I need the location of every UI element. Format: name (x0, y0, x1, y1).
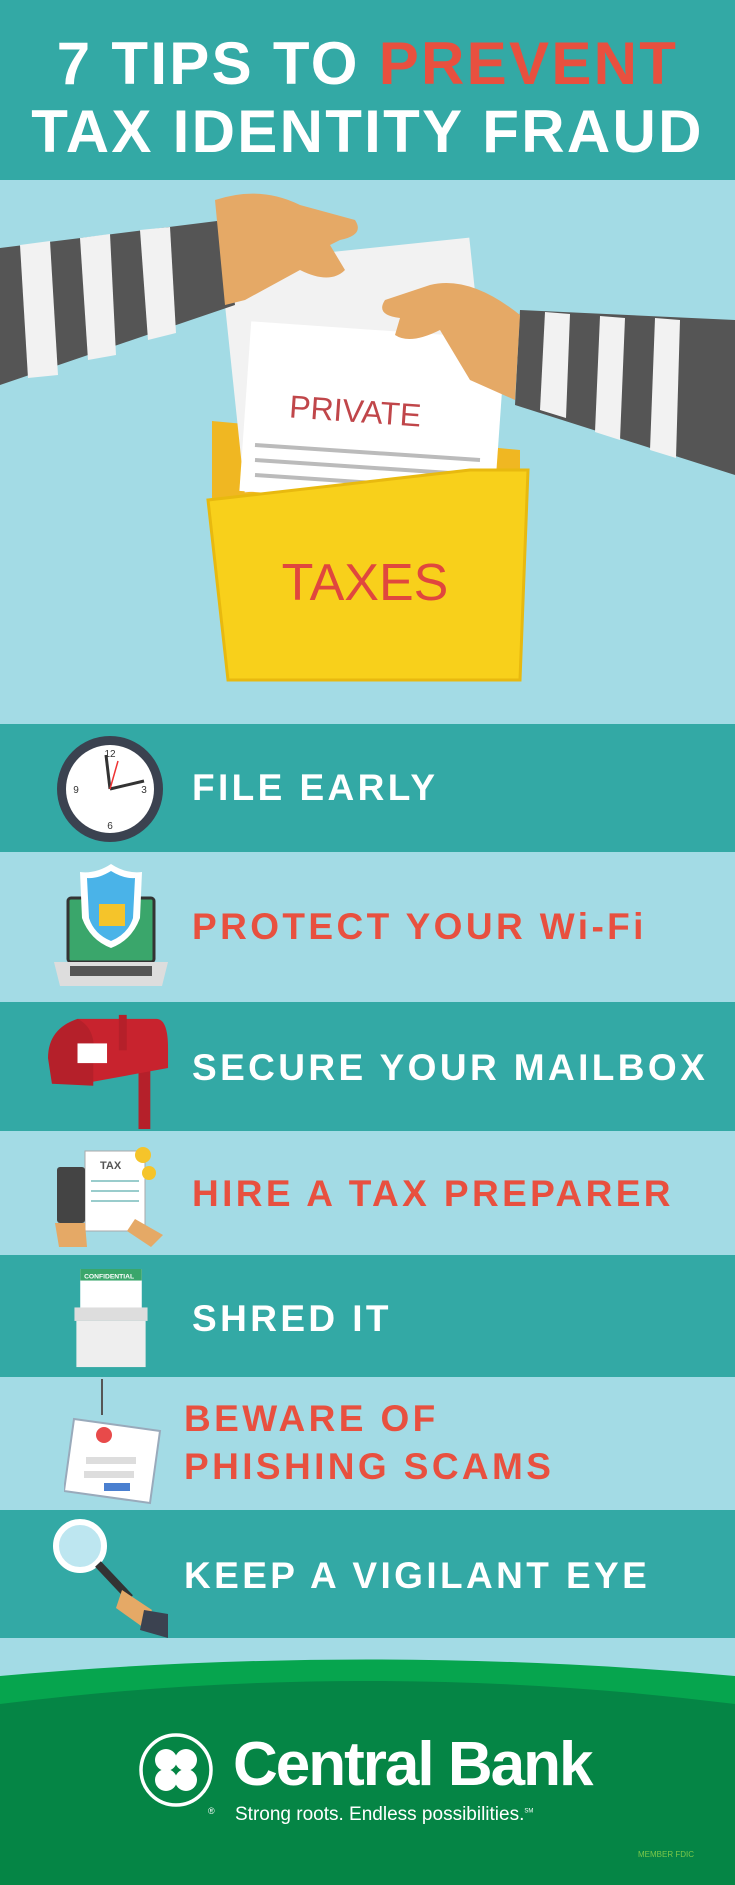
icon: clock: 3 (141, 785, 147, 796)
text: vigilant: KEEP A VIGILANT EYE (184, 1555, 650, 1596)
icon: laptop shield (54, 864, 168, 986)
tip 4: tax preparer (0, 1131, 735, 1255)
papers: PRIVATE (288, 388, 422, 434)
left arm (0, 194, 358, 385)
icon: magnifier (53, 1519, 168, 1638)
hero illustration (0, 194, 735, 682)
text: member fdic: MEMBER FDIC (638, 1850, 694, 1859)
title (31, 30, 704, 165)
logo: central bank (139, 1730, 594, 1825)
text: tax preparer: HIRE A TAX PREPARER (192, 1173, 674, 1214)
icon: flower emblem (139, 1733, 215, 1816)
text: bank name: Central Bank (233, 1730, 591, 1799)
title: 7 TIPS TO PREVENT (57, 30, 678, 97)
tip 1: file early (0, 724, 735, 852)
text: phishing (184, 1398, 554, 1487)
icon: clock: 6 (107, 821, 113, 832)
header band (0, 0, 735, 180)
tip 3: mailbox (0, 1002, 735, 1131)
icon: tax form (55, 1147, 163, 1247)
text: file early: FILE EARLY (192, 767, 438, 808)
hero illustration: TAXES (282, 554, 448, 612)
title: TAX IDENTITY FRAUD (31, 98, 704, 165)
text: phishing: PHISHING SCAMS (184, 1446, 554, 1487)
icon: clock (57, 736, 163, 842)
footer (0, 1638, 735, 1885)
icon: clock: 12 (104, 749, 116, 760)
icon: shredder: CONFIDENTIAL (84, 1274, 134, 1281)
folder back (212, 421, 520, 520)
icon: shredder (74, 1269, 148, 1368)
tip 7: vigilant eye (0, 1510, 735, 1638)
text: shred it: SHRED IT (192, 1298, 392, 1339)
icon: phishing hook (64, 1379, 161, 1504)
papers (221, 238, 506, 509)
text: phishing: BEWARE OF (184, 1398, 439, 1439)
icon: clock: 9 (73, 785, 79, 796)
icon: tax form: TAX (100, 1160, 122, 1172)
text: tagline: Strong roots. Endless possibilities.SM (235, 1804, 533, 1825)
tip 5: shred (0, 1255, 735, 1377)
folder front (208, 470, 528, 680)
icon: mailbox (48, 1014, 168, 1129)
right arm (382, 283, 735, 475)
tip 6: phishing (0, 1377, 735, 1510)
text: protect wifi: PROTECT YOUR Wi-Fi (192, 906, 647, 947)
tip 2: wifi (0, 852, 735, 1002)
text: mailbox: SECURE YOUR MAILBOX (192, 1047, 708, 1088)
icon: flower emblem: ® (208, 1806, 215, 1816)
